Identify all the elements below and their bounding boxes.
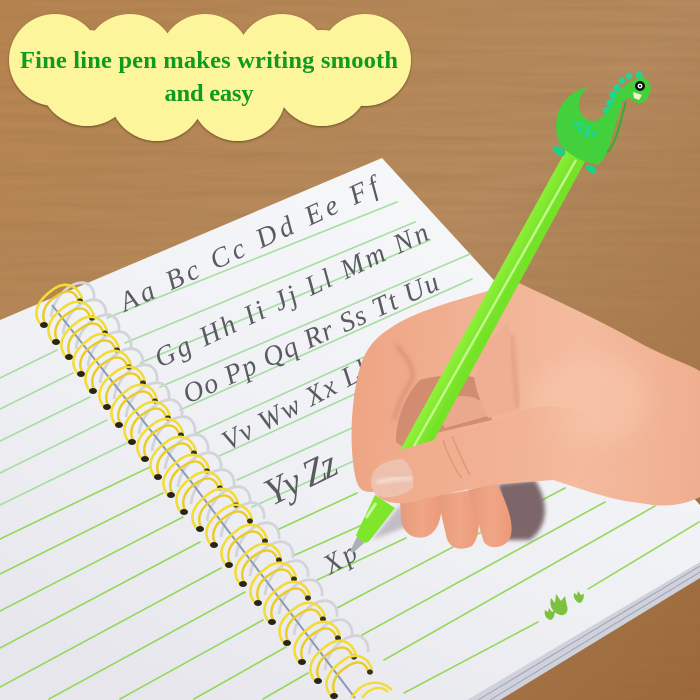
dinosaur back spikes <box>573 71 643 137</box>
index finger shading <box>394 345 412 420</box>
green ruled lines <box>0 202 699 699</box>
notebook page stack edge <box>462 558 700 700</box>
heading: callout text: and easy <box>164 80 254 107</box>
hand <box>352 282 700 505</box>
palm and index finger <box>352 282 700 505</box>
dinosaur teeth <box>633 92 642 100</box>
notebook page <box>0 158 700 700</box>
handwriting line 6: Xp <box>317 537 363 582</box>
handwriting line 3: Oo Pp Qq Rr Ss Tt Uu <box>178 267 444 410</box>
icon: dinosaur footprints <box>545 591 584 620</box>
handwritten alphabet practice <box>113 170 444 582</box>
fingers under the pen <box>472 322 518 418</box>
dinosaur eye <box>635 81 645 91</box>
web crease <box>512 335 518 408</box>
page gutter line <box>52 305 355 698</box>
pen highlight <box>414 160 576 446</box>
pen metal tip <box>350 537 364 553</box>
pen barrel <box>400 150 588 450</box>
dinosaur arm shading <box>607 101 626 152</box>
handwriting line 5: Yy Zz <box>258 443 344 514</box>
dinosaur body <box>556 77 651 165</box>
spiral binding <box>36 283 392 699</box>
finger: middle <box>468 483 512 547</box>
gap between index finger and thumb <box>396 375 492 447</box>
finger: ring <box>438 490 479 549</box>
pen lower barrel <box>356 495 395 543</box>
handwriting line 1: Aa Bc Cc Dd Ee Ff <box>113 170 386 319</box>
lower curled fingers <box>400 483 512 549</box>
nail highlight <box>376 478 412 483</box>
inner knuckles <box>438 396 488 428</box>
pen <box>350 150 588 553</box>
icon: green dinosaur pen topper <box>551 71 651 175</box>
shadow under hand <box>372 480 545 540</box>
finger: little <box>400 495 442 538</box>
thumb knuckle creases <box>443 436 470 478</box>
wrist highlight <box>530 355 650 445</box>
heading: callout text <box>20 47 398 107</box>
thumb <box>370 406 600 503</box>
thumb nail <box>371 459 413 497</box>
yellow coils <box>36 285 392 699</box>
pen lower highlight <box>366 503 376 518</box>
coil shadows on the page <box>51 283 368 670</box>
handwriting line 4: Vv Ww Xx Ll <box>217 355 373 457</box>
dinosaur feet <box>551 144 598 175</box>
handwriting line 2: Gg Hh Ii Jj Ll Mm Nn <box>150 217 434 374</box>
callout: cloud shape <box>9 14 411 141</box>
heading: callout text: Fine line pen makes writing smooth <box>20 47 398 74</box>
